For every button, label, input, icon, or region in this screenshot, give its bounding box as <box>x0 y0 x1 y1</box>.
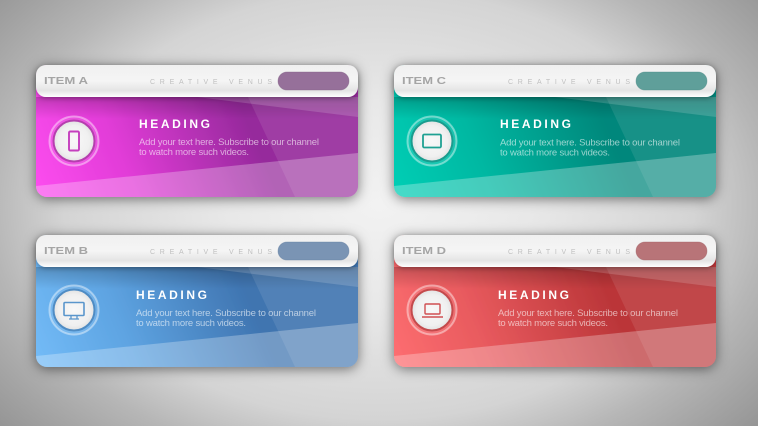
light facets <box>394 97 716 197</box>
brand text: CREATIVE VENUS <box>508 79 630 86</box>
brand text: CREATIVE VENUS <box>150 79 272 86</box>
icon: phone <box>50 116 98 166</box>
card body <box>36 65 358 197</box>
item label: ITEM C <box>402 76 446 87</box>
pill <box>636 72 707 90</box>
body text: to watch more such videos. <box>139 147 249 158</box>
icon: laptop <box>408 286 456 334</box>
heading: HEADING <box>500 117 574 131</box>
card body <box>394 235 716 367</box>
brand text: CREATIVE VENUS <box>508 249 630 256</box>
light facets <box>36 97 358 197</box>
heading: HEADING <box>139 117 213 131</box>
icon: monitor <box>50 286 98 334</box>
body text: to watch more such videos. <box>498 318 608 329</box>
header bar <box>394 65 716 97</box>
header bar <box>394 235 716 267</box>
pill <box>278 72 349 90</box>
item label: ITEM B <box>44 246 88 257</box>
panel: item B <box>36 235 358 367</box>
item label: ITEM D <box>402 246 446 257</box>
light facets <box>36 267 358 367</box>
brand text: CREATIVE VENUS <box>150 249 272 256</box>
heading: HEADING <box>498 288 572 302</box>
card body <box>394 65 716 197</box>
body text: to watch more such videos. <box>500 148 610 158</box>
pill <box>278 242 349 260</box>
header bar <box>36 235 358 267</box>
icon: tablet <box>408 116 456 166</box>
body text: Add your text here. Subscribe to our channel <box>500 138 680 148</box>
heading: HEADING <box>136 288 210 302</box>
light facets <box>394 267 716 367</box>
body text: Add your text here. Subscribe to our channel <box>498 308 678 319</box>
panel: item D <box>394 235 716 367</box>
pill <box>636 242 707 260</box>
panel: item A <box>36 65 358 197</box>
header bar <box>36 65 358 97</box>
body text: to watch more such videos. <box>136 318 246 329</box>
card body <box>36 235 358 367</box>
item label: ITEM A <box>44 76 88 87</box>
body text: Add your text here. Subscribe to our channel <box>139 137 319 148</box>
infographic cards <box>28 58 724 378</box>
panel: item C <box>394 65 716 197</box>
body text: Add your text here. Subscribe to our channel <box>136 308 316 319</box>
